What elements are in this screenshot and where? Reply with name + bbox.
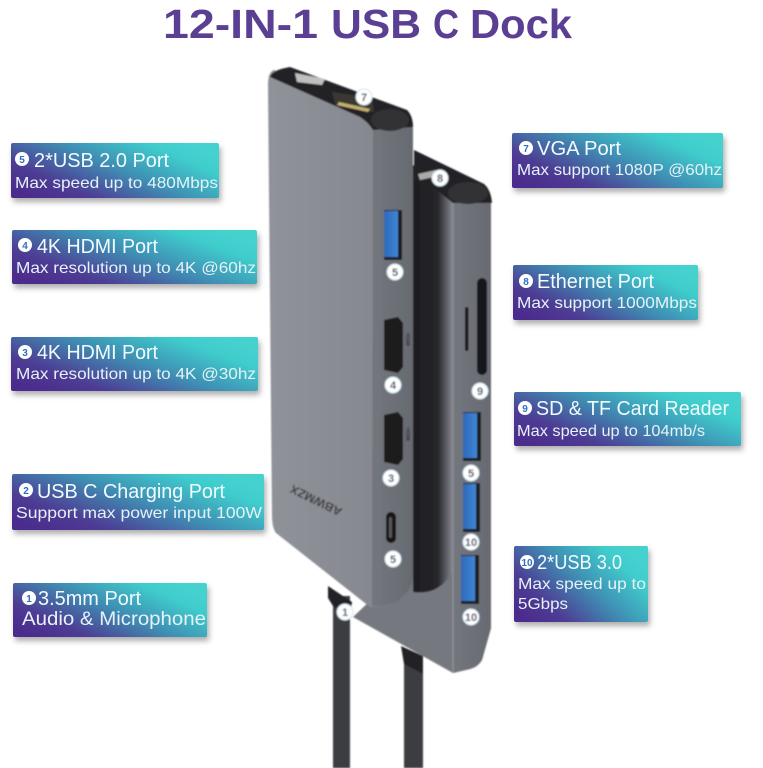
- callout: HDMI 60hz: Max resolution up to 4K @60hz: [16, 260, 256, 277]
- callout: Ethernet: [513, 265, 700, 324]
- callout: USB 3.0: 10: [521, 558, 533, 569]
- callout: card reader: Max speed up to 104mb/s: [517, 423, 705, 440]
- callout: USB 2.0: [11, 143, 221, 202]
- port number badges: 3: [388, 473, 394, 485]
- port number badges: 10: [465, 537, 477, 549]
- callout: HDMI 30hz: [11, 337, 260, 395]
- front ports: HDMI: [404, 333, 410, 346]
- callout: Ethernet: Ethernet Port: [537, 271, 654, 293]
- callout: 3.5mm: 1: [26, 594, 32, 605]
- port number badges: 5: [390, 554, 396, 566]
- card slots: [465, 278, 487, 375]
- front hub: [268, 67, 413, 607]
- callout: USB 3.0: 2*USB 3.0: [537, 552, 622, 574]
- callout: USB 3.0: [514, 546, 650, 626]
- port number badges: 9: [477, 386, 483, 398]
- callout: VGA: Max support 1080P @60hz: [517, 162, 722, 179]
- port number badges: 8: [437, 173, 443, 185]
- logo text: ABWMZX: [288, 482, 344, 519]
- callout: Ethernet: Max support 1000Mbps: [517, 295, 697, 312]
- callout: HDMI 30hz: 3: [22, 348, 28, 359]
- callout: USB 3.0: 5Gbps: [518, 596, 568, 613]
- callout: 3.5mm: [13, 583, 209, 641]
- callout: card reader: [514, 392, 743, 450]
- port number badges: 10: [465, 612, 477, 624]
- callout: card reader: SD & TF Card Reader: [536, 398, 729, 420]
- cables: [328, 586, 423, 768]
- device illustration: [268, 67, 492, 768]
- callout: HDMI 30hz: 4K HDMI Port: [37, 342, 158, 364]
- callout: 3.5mm: 3.5mm Port: [38, 588, 141, 610]
- port number badges: 4: [390, 380, 397, 392]
- callout: 3.5mm: Audio & Microphone: [22, 609, 206, 630]
- callout: USB C charging: [12, 474, 266, 534]
- front ports: [384, 210, 410, 543]
- title: [163, 1, 572, 47]
- port number badges: 5: [392, 267, 398, 279]
- callout: VGA: VGA Port: [537, 138, 621, 160]
- rear hub: [353, 150, 492, 673]
- title: Dock: [470, 1, 572, 47]
- callout: USB C charging: USB C Charging Port: [37, 481, 225, 503]
- callout: USB 3.0: Max speed up to: [518, 576, 646, 593]
- callout: USB 2.0: 5: [19, 155, 25, 166]
- callout: HDMI 60hz: 4K HDMI Port: [37, 236, 158, 258]
- callout: USB C charging: Support max power input 100W: [16, 505, 263, 522]
- USB ports rear: [461, 412, 481, 604]
- port number badges: 5: [468, 468, 474, 480]
- callout: USB 2.0: Max speed up to 480Mbps: [15, 175, 218, 192]
- front ports: HDMI: [404, 428, 410, 441]
- callout: HDMI 60hz: [12, 230, 259, 288]
- callout: Ethernet: 8: [523, 277, 529, 288]
- title: C: [433, 1, 459, 47]
- callout: VGA: [512, 133, 725, 192]
- port number badges: [337, 89, 488, 625]
- title: USB: [331, 1, 421, 47]
- callout: VGA: 7: [523, 144, 529, 155]
- callout: USB 2.0: 2*USB 2.0 Port: [34, 150, 169, 172]
- callout: HDMI 60hz: 4: [22, 241, 28, 252]
- callout: card reader: 9: [522, 404, 528, 415]
- callout: USB C charging: 2: [23, 486, 29, 497]
- title: 12-IN-1: [163, 1, 318, 47]
- port number badges: 1: [342, 607, 348, 619]
- callout: HDMI 30hz: Max resolution up to 4K @30hz: [16, 366, 256, 383]
- port number badges: 7: [361, 92, 367, 104]
